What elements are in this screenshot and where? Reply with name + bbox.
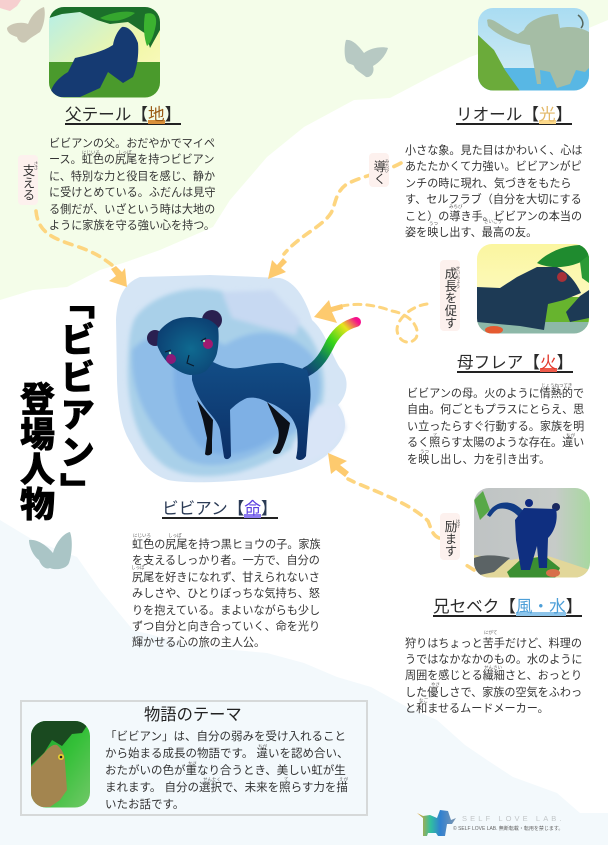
arrow: mother encourages growth <box>314 300 427 342</box>
furigana: て <box>284 777 288 782</box>
copyright: © SELF LOVE LAB. 無断転載・転用を禁じます。 <box>453 826 563 832</box>
picture: mother Flare <box>477 244 590 334</box>
picture: father Tail <box>49 7 160 98</box>
text: father description: ビビアンの父。おだやかでマイペ <box>49 138 215 150</box>
tag: supports <box>18 155 38 205</box>
text: Leo description: 姿を映し出す、最高の友。 <box>405 227 537 239</box>
text: Bibian description: 虹色の尻尾を持つ黒ヒョウの子。家族 <box>132 539 321 551</box>
furigana: せんさい <box>484 665 502 670</box>
furigana: さいこう <box>484 219 502 224</box>
picture: elephant Leo <box>478 8 589 91</box>
tag: cheers: 励ます <box>443 520 457 558</box>
text: Sebek description: 狩りはちょっと苦手だけど、料理の <box>405 638 582 650</box>
text: Bibian description <box>132 538 321 649</box>
icon: butterfly lower left <box>29 532 72 569</box>
text: theme description: 「ビビアン」は、自分の弱みを受け入れること <box>105 731 346 743</box>
heading: Leo: リオール【光】 <box>456 105 572 124</box>
panther body <box>192 362 311 460</box>
furigana: せんたく <box>203 777 221 782</box>
text: Bibian description: みしさや、ひとりぼっちな気持ち、怒 <box>132 588 320 600</box>
picture: owl <box>31 721 90 808</box>
furigana: ちが <box>566 433 575 438</box>
text: Bibian description: 輝かせる心の旅の主人公。 <box>132 637 265 649</box>
logo elephant <box>417 810 456 836</box>
furigana: やさ <box>431 682 440 687</box>
furigana: じょうねつてき <box>541 383 572 388</box>
text: Leo description: 小さな象。見た目はかわいく、心は <box>405 145 583 157</box>
tag: cheers <box>440 513 460 560</box>
icon: butterfly top left <box>7 7 45 43</box>
text: father description: ように家族を守る強い心を持つ。 <box>49 220 215 232</box>
text: theme description: いたお話です。 <box>105 799 184 811</box>
tag: encourages growth: せいちょう <box>456 266 461 288</box>
text: father description: に受けとめている。ふだんは見守 <box>49 187 215 199</box>
decorative flower <box>0 0 21 11</box>
text: Leo description: こと）の導き手。ビビアンの本当の <box>405 211 582 223</box>
text: Bibian description: 尻尾を好きになれず、甘えられないさ <box>132 572 320 584</box>
text: father description: る側だが、いざという時は大地の <box>49 204 215 216</box>
tag: supports: 支える <box>21 164 35 201</box>
furigana: にじいろ <box>133 533 151 538</box>
furigana: みちび <box>449 204 462 209</box>
tag: guides: 導く <box>372 160 386 185</box>
logo text: SELF LOVE LAB. <box>462 814 565 823</box>
furigana: しっぽ <box>131 565 144 570</box>
text: theme description: まれます。 自分の選択で、未来を照らす力を描 <box>105 782 348 794</box>
text: theme description <box>105 730 349 811</box>
arrow: brother cheers Bibian <box>328 453 474 570</box>
heading: father: 父テール【地】 <box>65 105 181 124</box>
panther ears <box>147 330 163 346</box>
furigana: て <box>433 433 438 438</box>
text: Sebek description: した優しさで、家族の空気をふわっ <box>405 687 582 699</box>
heading: theme: 物語のテーマ <box>144 706 242 724</box>
text: Flare description: い立ったらすぐ行動する。家族を明 <box>407 421 584 433</box>
illustration: Bibian watercolor panther <box>116 275 356 482</box>
text: Sebek description <box>405 637 583 715</box>
text: Sebek description: うではなかなかのもの。水のように <box>405 654 583 666</box>
furigana: なご <box>419 698 428 703</box>
furigana: えが <box>339 777 348 782</box>
text: Flare description: 自由。何ごともプラスにとらえ、思 <box>407 404 584 416</box>
tag: guides: みちび <box>385 159 390 172</box>
panther far legs <box>197 400 290 455</box>
furigana: にがて <box>484 630 497 635</box>
icon: butterfly centre top <box>345 40 388 77</box>
text: theme description: おたがいの色が重なり合うとき、美しい虹が生 <box>105 765 346 777</box>
panther tail <box>306 322 356 372</box>
text: father description: に、特別な力と役目を感じ、静か <box>49 171 215 183</box>
text: Flare description <box>407 387 584 466</box>
text: Sebek description: と和ませるムードメーカー。 <box>405 703 549 715</box>
heading: Bibian: ビビアン【命】 <box>162 499 278 518</box>
text: father description <box>49 137 215 232</box>
title: characters: 登場人物 <box>15 381 54 521</box>
text: Leo description <box>405 144 583 239</box>
tag: guides <box>369 153 389 187</box>
text: Flare description: ビビアンの母。火のように情熱的で <box>407 388 584 400</box>
tag: cheers: はげ <box>456 519 461 528</box>
arrow: Leo guides Bibian <box>268 163 401 279</box>
text: Leo description: ンチの時に現れ、気づきをもたら <box>405 178 572 190</box>
furigana: うつ <box>429 221 438 226</box>
text: Bibian description: りを抱えている。まよいながらも少し <box>132 605 320 617</box>
text: Leo description: あたたかくて力強い。ビビアンがピ <box>405 161 582 173</box>
title: Bibian: 「ビビアン」 <box>55 284 94 510</box>
heading: Sebek: 兄セベク【風・水】 <box>433 597 582 616</box>
theme box frame <box>21 701 367 815</box>
text: Flare description: るく照らす太陽のような存在。違い <box>407 437 584 449</box>
background: pale green wash <box>0 0 608 300</box>
tag: encourages growth <box>440 260 460 331</box>
text: Bibian description: を支えるしっかり者。一方で、自分の <box>132 555 320 567</box>
furigana: ちが <box>258 744 267 749</box>
furigana: しっぽ <box>118 150 132 155</box>
furigana: しっぽ <box>168 533 182 538</box>
text: Flare description: を映し出し、力を引き出す。 <box>407 454 550 466</box>
picture: brother Sebek <box>474 488 590 578</box>
tag: supports: ささ <box>34 161 39 170</box>
furigana: かさ <box>188 761 197 766</box>
panther head <box>157 317 219 375</box>
text: father description: ース。虹色の尻尾を持つビビアン <box>49 154 214 166</box>
text: Sebek description: 周囲を感じとる繊細さと、おっとり <box>405 670 582 682</box>
furigana: うつ <box>420 449 429 454</box>
background: pale blue wash <box>0 520 608 845</box>
furigana: にじいろ <box>82 150 100 155</box>
tag: encourages growth: 成長を促す <box>443 267 457 329</box>
heading: Flare: 母フレア【火】 <box>457 353 573 372</box>
text: theme description: から始まる成長の物語です。 違いを認め合い、 <box>105 748 349 760</box>
text: Bibian description: ずつ自分と向き合っていく、命を光り <box>132 621 320 633</box>
text: Leo description: す、セルフラブ（自分を大切にする <box>405 194 582 206</box>
arrow: father supports Bibian <box>36 211 127 287</box>
